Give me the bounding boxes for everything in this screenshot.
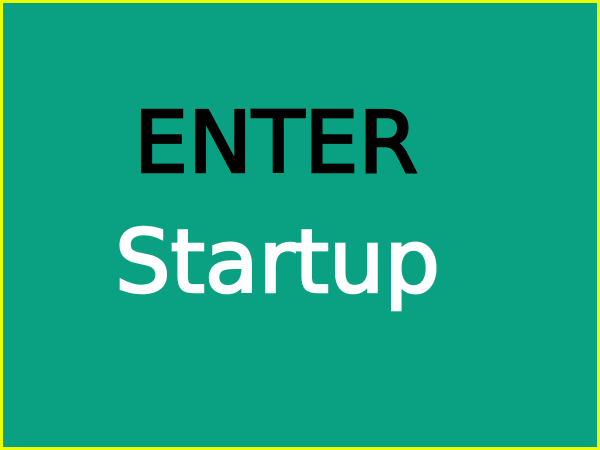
heading: ENTER: ENTER: [134, 94, 418, 193]
heading: Startup: Startup: [115, 211, 440, 313]
